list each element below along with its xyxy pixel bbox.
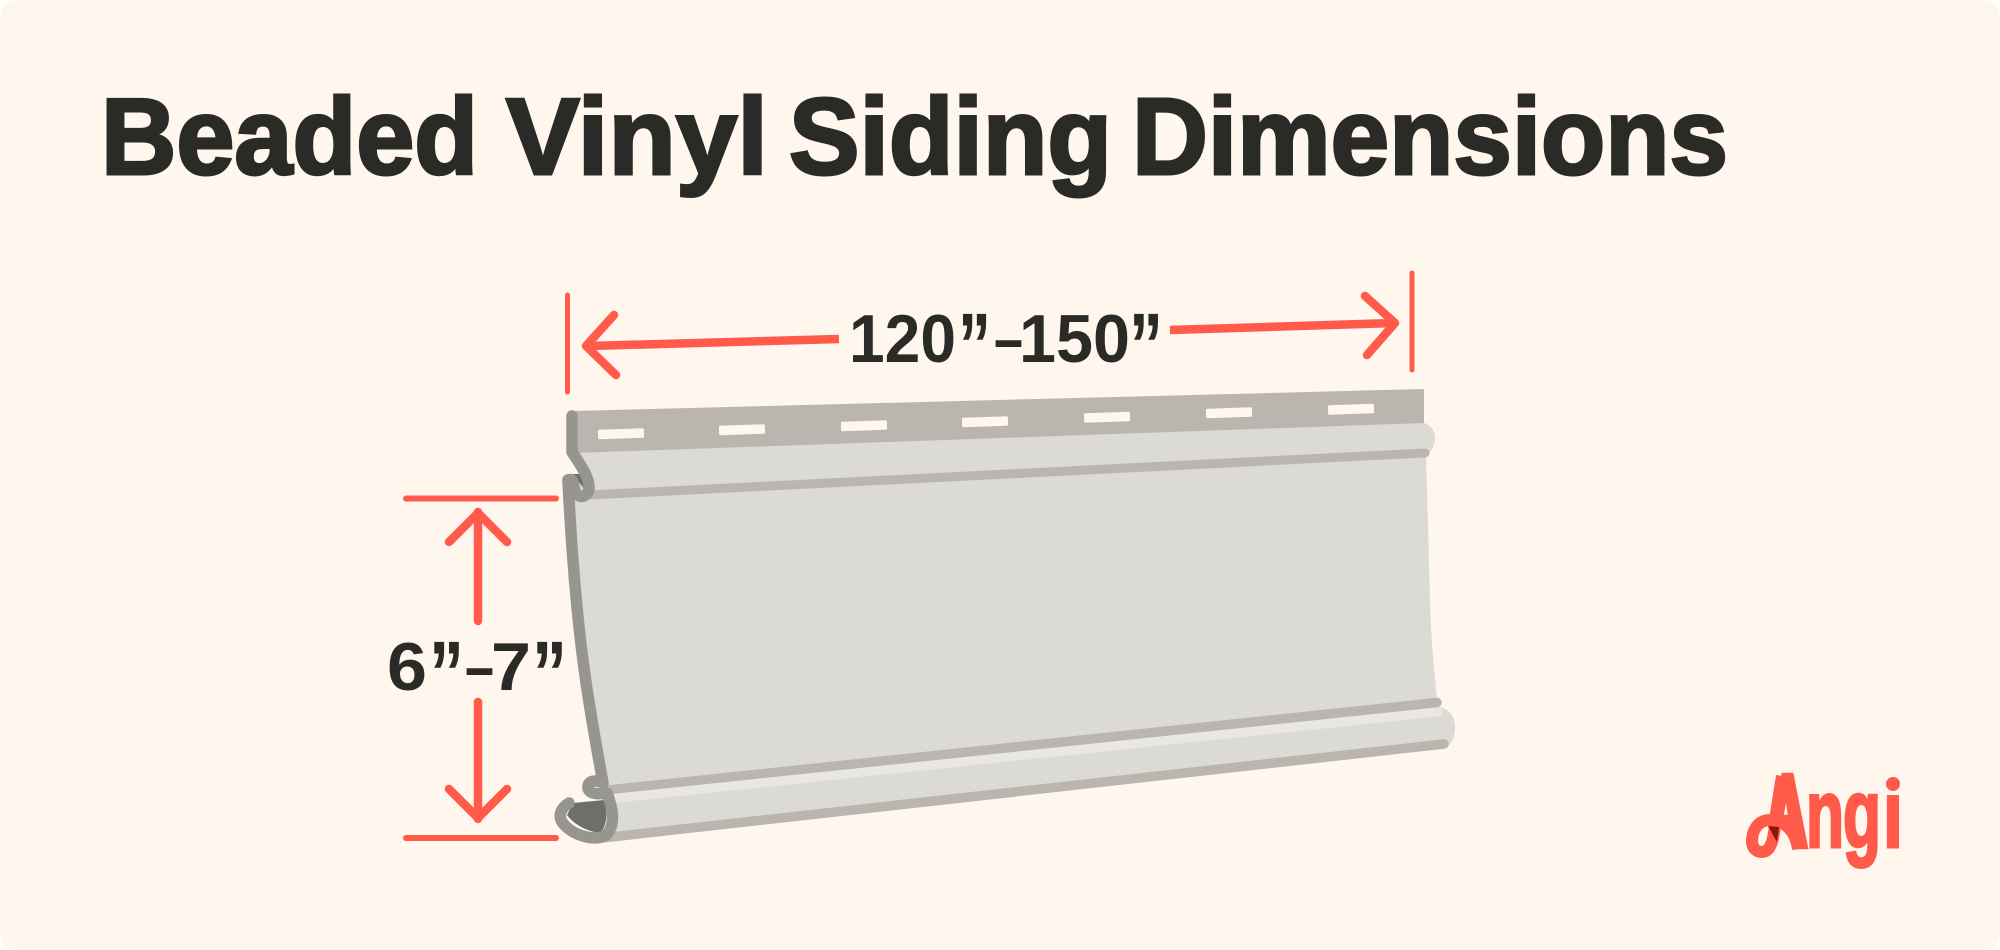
top hook shadow (573, 474, 585, 490)
left arrow (586, 315, 839, 375)
top nailing flange (572, 389, 1424, 453)
logo wordmark (1781, 772, 1899, 869)
left tick (565, 295, 570, 392)
bottom hook shadow (567, 800, 606, 833)
title: Dimensions (1132, 76, 1728, 198)
title (101, 76, 1728, 198)
title: Siding (789, 76, 1112, 198)
dimension: height (406, 498, 556, 838)
logo wordmark: n (1806, 759, 1844, 868)
logo wordmark: A (1767, 754, 1808, 870)
height label: – (465, 629, 494, 705)
Angi logo (1746, 772, 1900, 869)
title: Beaded (101, 76, 478, 198)
logo loop (1752, 820, 1798, 852)
height label: ” (532, 623, 567, 725)
length label (849, 295, 1163, 397)
illustration: beaded vinyl siding panel (560, 389, 1455, 841)
up arrow (449, 512, 507, 621)
length label: 120 (849, 301, 956, 377)
top edge profile (568, 416, 589, 496)
lower bead line (608, 702, 1437, 790)
right arrow (1170, 296, 1395, 355)
height label: 6 (387, 629, 427, 705)
length label: ” (958, 295, 991, 397)
logo shadow (1768, 826, 1779, 842)
logo wordmark: i (1883, 759, 1903, 868)
logo A strokes (1775, 776, 1799, 849)
top tick (406, 496, 556, 502)
right tick (1410, 273, 1414, 370)
height label: 7 (491, 629, 531, 705)
logo i dot (1886, 777, 1900, 791)
upper bead line (590, 453, 1425, 495)
height label: ” (429, 623, 464, 725)
logo wordmark: g (1843, 759, 1881, 868)
title: Vinyl (506, 76, 768, 198)
left edge profile with bottom curl (560, 480, 612, 838)
siding face (568, 423, 1455, 841)
nail slots (598, 404, 1374, 439)
height label (387, 623, 567, 725)
length label: ” (1129, 295, 1163, 397)
length label: 150 (1019, 301, 1130, 377)
bottom tick (406, 835, 556, 841)
length label: – (994, 301, 1023, 377)
bottom bead line (602, 744, 1444, 838)
down arrow (449, 702, 507, 819)
bead highlight (612, 712, 1438, 798)
dimension: length (568, 273, 1412, 392)
